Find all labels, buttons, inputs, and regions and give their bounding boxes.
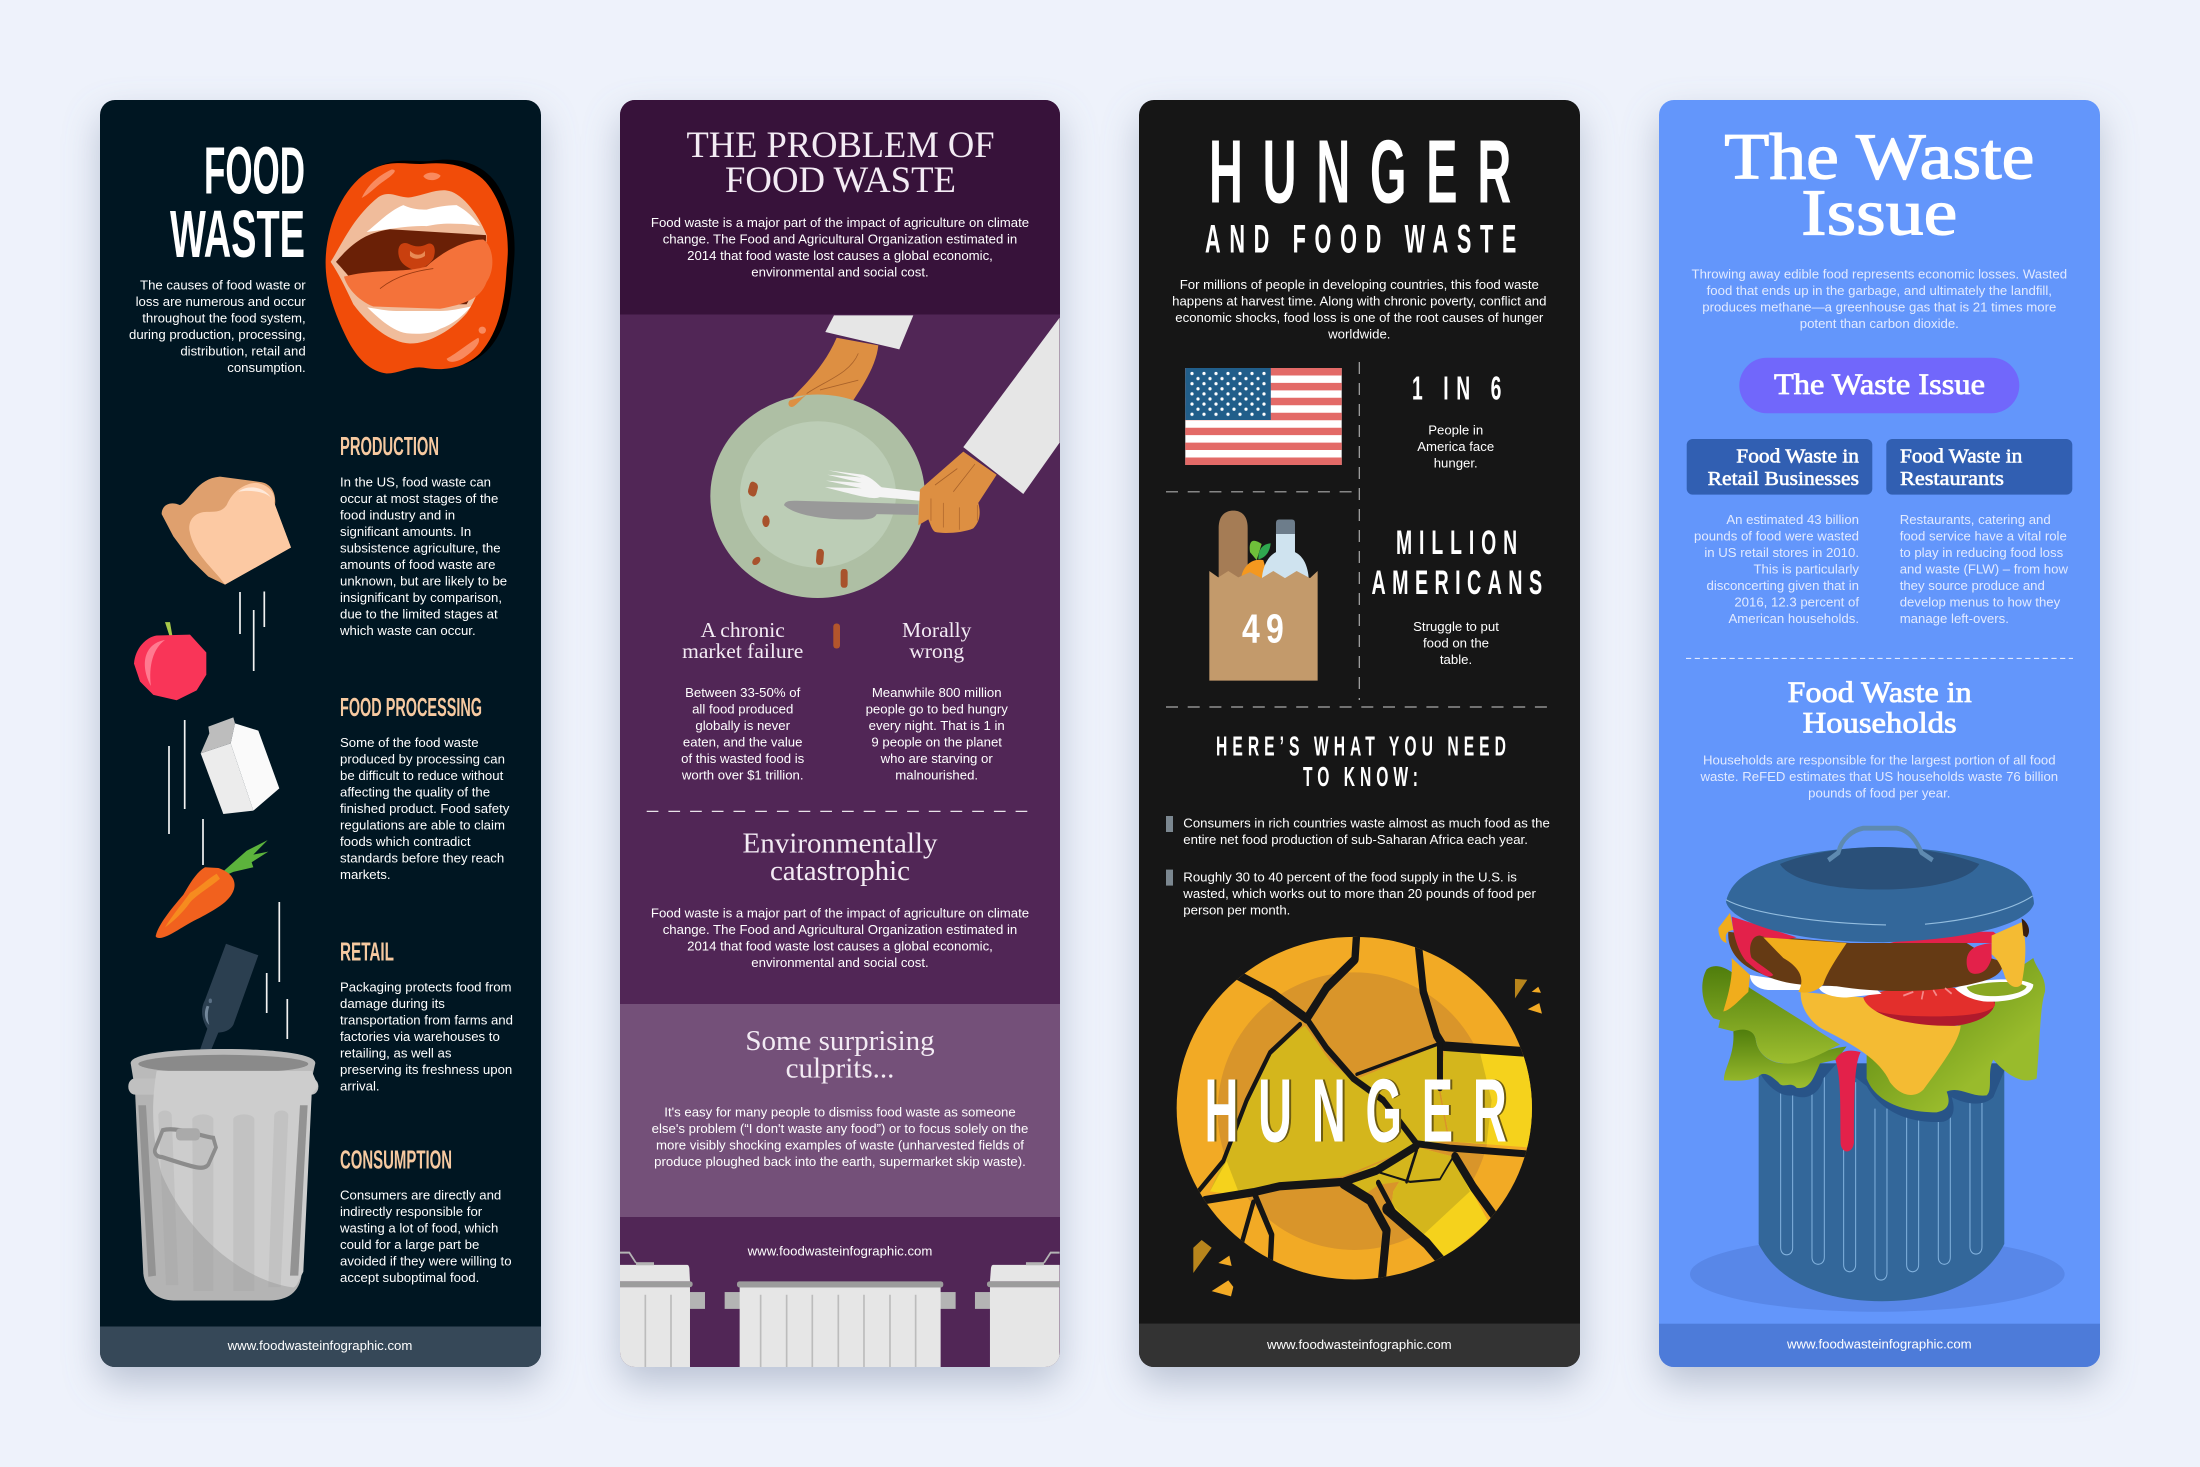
panel: the waste issue xyxy=(1659,100,2100,1368)
section: surprising culprits: more visibly shocking examples of waste (unharvested fields of xyxy=(656,1137,1024,1152)
section: production: subsistence agriculture, the xyxy=(340,540,501,555)
section: households: Households are responsible for the largest portion of all food xyxy=(1703,753,2056,768)
bullet: percent of food supply xyxy=(1166,869,1537,917)
column: chronic market failure: A chronic xyxy=(701,618,785,642)
title: problem of food waste xyxy=(686,125,994,201)
heading: what you need to know xyxy=(1216,730,1511,792)
intro text: Throwing away edible food represents economic losses. Wasted xyxy=(1692,266,2067,282)
column: retail businesses xyxy=(1687,439,1872,626)
column: morally wrong: 9 people on the planet xyxy=(871,734,1002,750)
section: food processing xyxy=(340,692,510,882)
column: retail businesses: This is particularly xyxy=(1753,562,1859,576)
footer band xyxy=(1139,1324,1580,1368)
column: retail businesses: pounds of food were wasted xyxy=(1694,528,1859,544)
intro text: environmental and social cost. xyxy=(751,264,929,280)
title: hunger xyxy=(1205,122,1531,262)
heading: what you need to know: TO KNOW: xyxy=(1303,761,1423,792)
illustration: cracked plate xyxy=(1173,933,1542,1296)
column: morally wrong: malnourished. xyxy=(895,768,978,782)
footer band xyxy=(1659,1324,2100,1368)
bullet: percent of food supply: person per month. xyxy=(1183,902,1290,917)
section: production: PRODUCTION xyxy=(340,431,439,461)
column: chronic market failure: worth over $1 trillion. xyxy=(681,768,804,782)
footer band: food waste xyxy=(100,1326,541,1368)
section: food processing: be difficult to reduce without xyxy=(340,768,504,783)
column: restaurants: food service have a vital role xyxy=(1900,528,2067,544)
column: chronic market failure xyxy=(681,618,805,782)
column: morally wrong: Morally xyxy=(902,618,972,642)
intro text: consumption. xyxy=(227,360,306,375)
section: retail: preserving its freshness upon xyxy=(340,1062,512,1077)
footer url: www.foodwasteinfographic.com xyxy=(1266,1337,1452,1352)
section: production: insignificant by comparison, xyxy=(340,590,502,605)
section: consumption: avoided if they were willing to xyxy=(340,1253,512,1268)
pill: the waste issue xyxy=(1739,358,2019,413)
stat: 1 in 6: 1 IN 6 xyxy=(1412,369,1509,406)
section: retail: factories via warehouses to xyxy=(340,1029,500,1044)
section: retail xyxy=(340,936,513,1094)
column: morally wrong xyxy=(866,618,1008,782)
section: surprising culprits: It's easy for many people to dismiss food waste as someone xyxy=(664,1104,1016,1119)
stat: million americans: table. xyxy=(1440,652,1472,667)
illustration: burger in trash can xyxy=(1690,828,2065,1312)
column: chronic market failure: market failure xyxy=(682,639,803,663)
section: food processing: finished product. Food safety xyxy=(340,801,510,816)
column: restaurants: develop menus to how they xyxy=(1900,594,2061,610)
intro text: distribution, retail and xyxy=(180,344,306,358)
section: households: Households xyxy=(1803,706,1957,740)
section: food processing: FOOD PROCESSING xyxy=(340,692,482,722)
intro text: throughout the food system, xyxy=(142,310,306,326)
column: retail businesses: Retail Businesses xyxy=(1708,468,1859,490)
section: retail: transportation from farms and xyxy=(340,1013,513,1028)
stat: million americans: food on the xyxy=(1423,635,1489,650)
intro text: worldwide. xyxy=(1327,326,1390,342)
section: retail: RETAIL xyxy=(340,936,394,966)
section: households: Food Waste in xyxy=(1788,676,1972,709)
intro text: food that ends up in the garbage, and ultimately the landfill, xyxy=(1707,283,2052,298)
title: problem of food waste: THE PROBLEM OF xyxy=(686,125,994,166)
speed lines xyxy=(169,592,287,1039)
stat: 1 in 6: hunger. xyxy=(1434,455,1478,470)
section: environmentally catastrophic: environmental and social cost. xyxy=(751,955,929,970)
column: retail businesses: disconcerting given that in xyxy=(1707,578,1859,593)
column: restaurants: Restaurants, catering and xyxy=(1900,512,2051,527)
column: chronic market failure: eaten, and the value xyxy=(683,734,802,750)
section: production: food industry and in xyxy=(340,507,455,522)
section: consumption: Consumers are directly and xyxy=(340,1187,501,1202)
intro text: 2014 that food waste lost causes a global economic, xyxy=(687,248,993,263)
column: restaurants: manage left-overs. xyxy=(1900,611,2009,626)
panel: food waste xyxy=(100,100,541,1368)
footer url: www.foodwasteinfographic.com xyxy=(747,1244,932,1259)
illustration: hands and plate xyxy=(710,315,1060,598)
section: consumption xyxy=(339,1144,512,1285)
column: retail businesses: in US retail stores in 2010. xyxy=(1704,545,1859,560)
bullet: consumers xyxy=(1166,816,1550,847)
bullet: percent of food supply: Roughly 30 to 40 percent of the food supply in the U.S. is xyxy=(1183,869,1517,884)
section: households xyxy=(1699,676,2058,801)
stat: million americans: AMERICANS xyxy=(1372,564,1548,602)
intro text: potent than carbon dioxide. xyxy=(1800,316,1959,331)
section: production: due to the limited stages at xyxy=(340,606,498,621)
section: environmentally catastrophic: Environmentally xyxy=(743,828,938,860)
column: restaurants xyxy=(1886,439,2072,626)
section: retail: retailing, as well as xyxy=(340,1046,452,1061)
section: retail: damage during its xyxy=(340,996,445,1011)
column: restaurants: they source produce and xyxy=(1900,578,2045,593)
culprits band xyxy=(620,1004,1060,1217)
section: food processing: markets. xyxy=(340,867,391,882)
number on bag: 49 xyxy=(1242,605,1290,651)
title: hunger: AND FOOD WASTE xyxy=(1205,218,1525,262)
stat: million americans xyxy=(1372,524,1548,667)
section: food processing: standards before they reach xyxy=(340,850,504,866)
title: food waste: WASTE xyxy=(170,197,305,272)
section: consumption: accept suboptimal food. xyxy=(340,1270,479,1285)
title: problem of food waste: FOOD WASTE xyxy=(725,160,956,201)
stat: 1 in 6: America face xyxy=(1417,439,1494,454)
intro text: loss are numerous and occur xyxy=(136,294,306,309)
panel: hunger xyxy=(1139,100,1580,1368)
section: food processing: produced by processing can xyxy=(340,752,505,766)
column: retail businesses: 2016, 12.3 percent of xyxy=(1734,594,1859,610)
panel: problem of food waste xyxy=(617,100,1063,1370)
section: production: amounts of food waste are xyxy=(340,557,495,572)
bullet: consumers: Consumers in rich countries waste almost as much food as the xyxy=(1183,816,1550,830)
section: consumption: wasting a lot of food, which xyxy=(339,1220,498,1235)
column: retail businesses: American households. xyxy=(1729,611,1859,626)
column: chronic market failure: Between 33-50% of xyxy=(685,685,801,700)
title: hunger: HUNGER xyxy=(1209,122,1531,222)
footer url: www.foodwasteinfographic.com xyxy=(227,1338,412,1353)
intro text: For millions of people in developing countries, this food waste xyxy=(1180,277,1539,292)
section: production: occur at most stages of the xyxy=(340,491,498,506)
column: chronic market failure: all food produced xyxy=(692,702,793,716)
intro text: Food waste is a major part of the impact of agriculture on climate xyxy=(651,215,1029,230)
crumbs xyxy=(747,480,848,588)
intro text: happens at harvest time. Along with chronic poverty, conflict and xyxy=(1172,294,1546,308)
title: food waste: FOOD xyxy=(204,134,305,209)
hunger word on plate: HUNGER xyxy=(1204,1062,1526,1162)
section: production: unknown, but are likely to be xyxy=(340,573,507,588)
icon: carrot xyxy=(156,840,268,938)
section: food processing: affecting the quality of the xyxy=(340,784,490,800)
section: surprising culprits: else's problem (“I don't waste any food”) or to focus solely on the xyxy=(652,1121,1028,1136)
icon: bottle xyxy=(195,944,258,1066)
column: morally wrong: wrong xyxy=(909,639,964,663)
section: consumption: could for a large part be xyxy=(340,1237,479,1252)
footer url: www.foodwasteinfographic.com xyxy=(1786,1336,1972,1352)
section: food processing: Some of the food waste xyxy=(340,735,479,750)
title: food waste xyxy=(170,134,305,272)
section: retail: Packaging protects food from xyxy=(340,980,512,995)
header band xyxy=(620,100,1060,314)
column: retail businesses: An estimated 43 billion xyxy=(1726,512,1859,527)
section: environmentally catastrophic: Food waste is a major part of the impact of agriculture on climate xyxy=(651,905,1029,920)
intro text: during production, processing, xyxy=(129,327,306,342)
hunger word on plate: HUNGER xyxy=(1206,1062,1528,1162)
bullet: consumers: entire net food production of sub-Saharan Africa each year. xyxy=(1183,832,1528,847)
column: morally wrong: people go to bed hungry xyxy=(866,702,1008,716)
intro text: economic shocks, food loss is one of the root causes of hunger xyxy=(1175,310,1544,325)
section: production: which waste can occur. xyxy=(339,623,476,638)
icon: grey trash can xyxy=(128,1049,318,1300)
section: households: waste. ReFED estimates that US households waste 76 billion xyxy=(1699,769,2058,784)
stat: 1 in 6 xyxy=(1412,369,1509,470)
column: chronic market failure: of this wasted food is xyxy=(681,751,805,766)
crumb divider xyxy=(833,624,840,648)
stat: 1 in 6: People in xyxy=(1428,422,1483,437)
stat: million americans: MILLION xyxy=(1396,524,1524,562)
bins at the bottom xyxy=(617,1253,1063,1370)
icon: apple xyxy=(134,622,206,700)
column: restaurants: and waste (FLW) – from how xyxy=(1900,562,2068,576)
column: restaurants: Food Waste in xyxy=(1900,445,2022,467)
column: retail businesses: Food Waste in xyxy=(1736,445,1859,467)
section: food processing: foods which contradict xyxy=(340,834,471,849)
section: environmentally catastrophic: change. The Food and Agricultural Organization estimated in xyxy=(663,922,1017,937)
hunger word on plate xyxy=(1204,1062,1528,1162)
section: households: pounds of food per year. xyxy=(1808,786,1950,801)
section: food processing: regulations are able to claim xyxy=(340,818,505,832)
section: production xyxy=(339,431,507,638)
icon: milk carton xyxy=(201,717,279,814)
icon: grocery bag xyxy=(1209,511,1318,681)
section: surprising culprits: culprits... xyxy=(786,1052,894,1084)
column: restaurants: Restaurants xyxy=(1900,468,2004,490)
section: environmentally catastrophic: 2014 that food waste lost causes a global economic, xyxy=(687,938,993,953)
stat: million americans: Struggle to put xyxy=(1413,619,1499,634)
column: restaurants: to play in reducing food loss xyxy=(1900,545,2064,560)
icon: us flag xyxy=(1185,368,1342,465)
intro text: The causes of food waste or xyxy=(140,278,306,292)
section: environmentally catastrophic: catastrophic xyxy=(770,855,910,887)
pill: the waste issue: The Waste Issue xyxy=(1774,368,1985,401)
section: production: significant amounts. In xyxy=(340,524,471,539)
column: morally wrong: every night. That is 1 in xyxy=(869,718,1005,733)
section: surprising culprits: Some surprising xyxy=(745,1025,935,1057)
title: the waste issue xyxy=(1724,120,2034,249)
title: the waste issue: The Waste xyxy=(1724,120,2034,194)
heading: what you need to know: HERE’S WHAT YOU NEED xyxy=(1216,730,1511,762)
intro text: produces methane—a greenhouse gas that is 21 times more xyxy=(1702,300,2056,314)
section: surprising culprits: produce ploughed back into the earth, supermarket skip waste). xyxy=(654,1154,1026,1169)
column: morally wrong: Meanwhile 800 million xyxy=(872,685,1002,700)
section: surprising culprits xyxy=(652,1025,1028,1169)
section: retail: arrival. xyxy=(340,1079,380,1094)
section: environmentally catastrophic xyxy=(651,828,1029,970)
plate shards xyxy=(1193,979,1542,1296)
column: chronic market failure: globally is never xyxy=(695,718,791,733)
intro text: change. The Food and Agricultural Organization estimated in xyxy=(663,232,1017,246)
section: consumption: indirectly responsible for xyxy=(340,1204,483,1219)
bullet: percent of food supply: wasted, which works out to more than 20 pounds of food per xyxy=(1182,886,1537,901)
column: morally wrong: who are starving or xyxy=(880,751,993,766)
icon: bread xyxy=(162,477,291,585)
icon: open mouth xyxy=(326,160,515,373)
title: the waste issue: Issue xyxy=(1801,176,1957,249)
section: production: In the US, food waste can xyxy=(340,474,491,489)
section: consumption: CONSUMPTION xyxy=(340,1144,452,1174)
